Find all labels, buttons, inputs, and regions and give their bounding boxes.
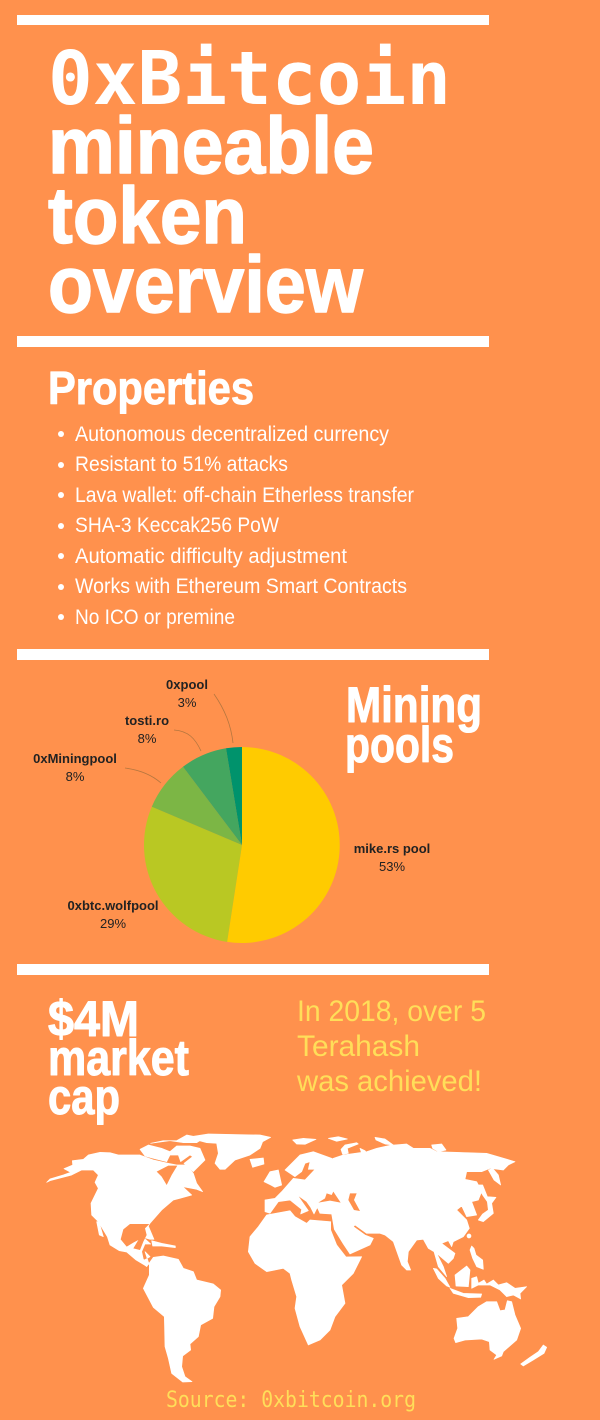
- heading: properties: Properties: [48, 362, 254, 414]
- pie labels: 0xMiningpool: [33, 751, 117, 766]
- pie chart: [144, 747, 340, 943]
- pie labels: 0xbtc.wolfpool: [68, 898, 158, 913]
- pie labels: 53%: [379, 859, 405, 874]
- list: properties: Works with Ethereum Smart Contracts: [75, 575, 407, 598]
- title: overview: [48, 240, 364, 329]
- pie labels: [33, 677, 430, 931]
- pie labels: 8%: [138, 731, 157, 746]
- pie labels: tosti.ro: [125, 713, 169, 728]
- title: [48, 36, 451, 329]
- callout: terahash: was achieved!: [296, 1065, 482, 1098]
- callout: terahash: Terahash: [297, 1030, 420, 1063]
- source line: Source: 0xbitcoin.org: [166, 1388, 416, 1413]
- panel: properties: [48, 362, 414, 629]
- list: properties: Automatic difficulty adjustment: [75, 545, 347, 568]
- heading: market cap: $4M: [48, 991, 139, 1047]
- list: properties: Lava wallet: off-chain Etherless transfer: [75, 484, 414, 507]
- list: properties: Resistant to 51% attacks: [75, 453, 288, 476]
- heading: market cap: cap: [48, 1069, 120, 1125]
- heading: mining pools: Mining: [346, 677, 482, 733]
- heading: market cap: market: [48, 1030, 189, 1086]
- heading: mining pools: pools: [345, 717, 454, 773]
- callout: terahash: In 2018, over 5: [297, 995, 486, 1028]
- pie labels: mike.rs pool: [354, 841, 430, 856]
- pie labels: 8%: [66, 769, 85, 784]
- title: 0xBitcoin: [48, 36, 451, 122]
- americas and greenland: [47, 1134, 271, 1382]
- pie labels: 0xpool: [166, 677, 208, 692]
- pie leader lines: [125, 694, 233, 783]
- title: mineable: [48, 101, 374, 190]
- heading: mining pools: [345, 677, 482, 773]
- list: properties: [58, 423, 414, 629]
- world map: [47, 1134, 547, 1382]
- callout: terahash: [296, 995, 486, 1098]
- pie labels: 29%: [100, 916, 126, 931]
- panel: mining pools: [33, 677, 482, 943]
- list: properties: Autonomous decentralized currency: [75, 423, 389, 446]
- title: token: [48, 171, 247, 260]
- heading: market cap: [48, 991, 189, 1125]
- pie labels: 3%: [178, 695, 197, 710]
- eurasia, africa, australia and islands: [248, 1137, 547, 1366]
- list: properties: SHA-3 Keccak256 PoW: [75, 514, 279, 537]
- list: properties: No ICO or premine: [75, 606, 235, 629]
